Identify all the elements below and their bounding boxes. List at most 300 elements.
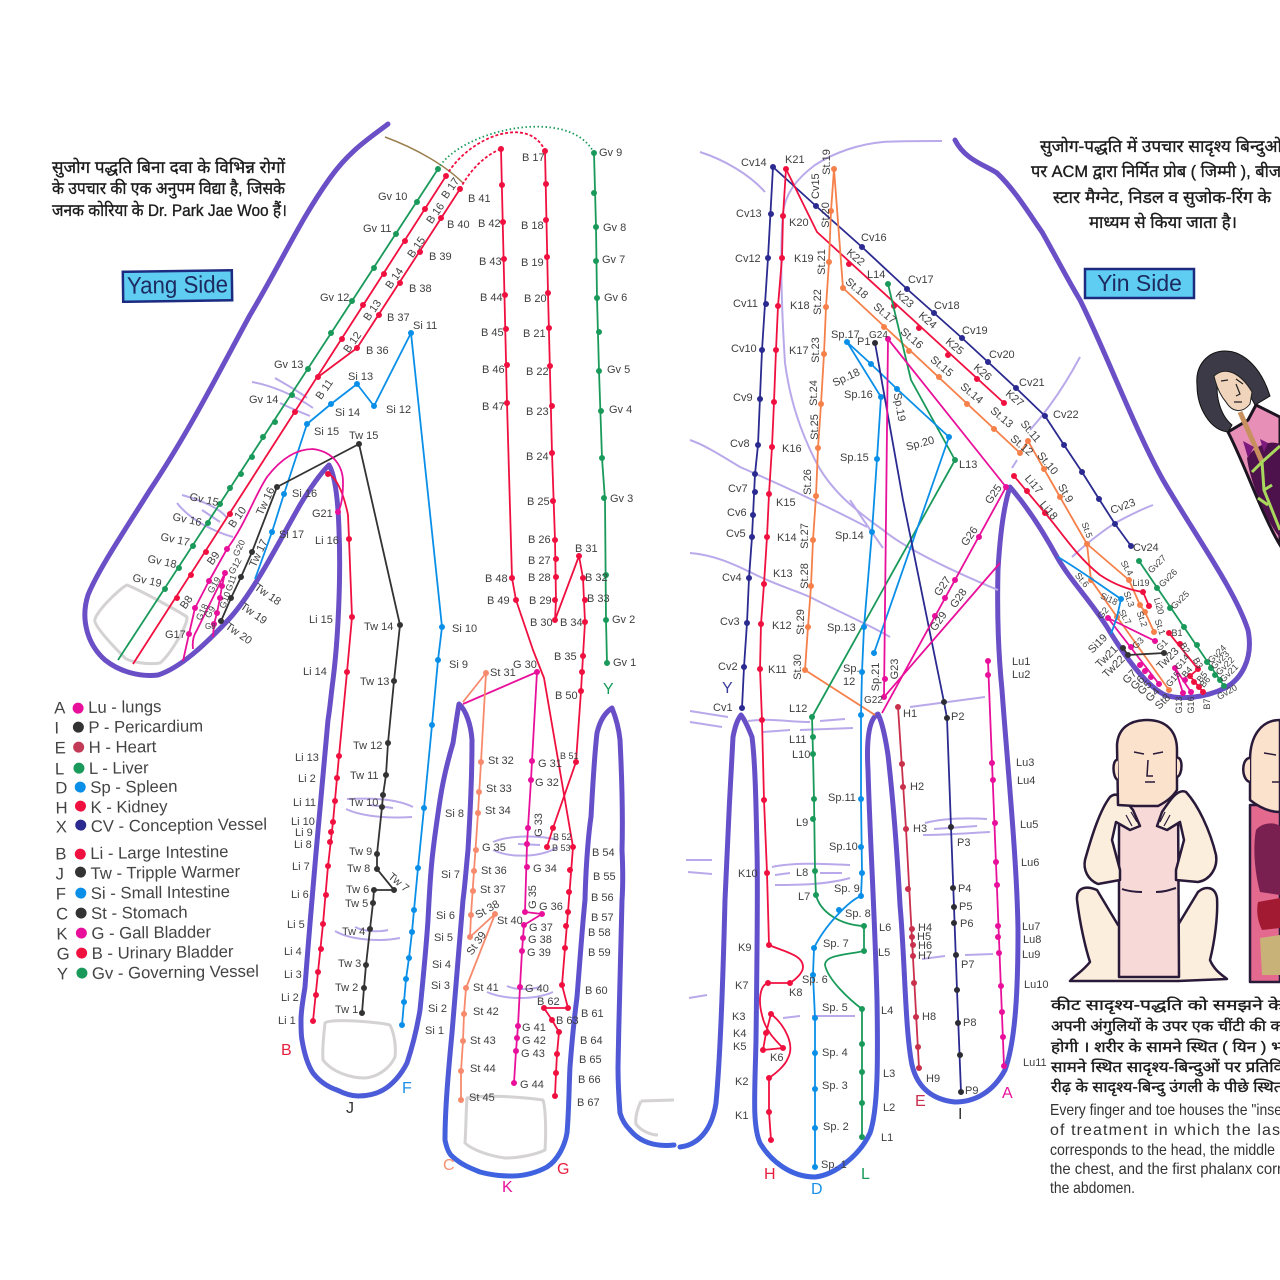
labels: small intestine: Si 10 (452, 623, 477, 635)
legend: yang meridians: Gv - Governing Vessel (92, 962, 259, 983)
labels: governing vessel Yang: Gv 5 (607, 364, 630, 376)
finger letters Yang: F (402, 1080, 412, 1097)
labels: kidney: K11 (768, 664, 787, 676)
intro text: Yang page: जनक कोरिया के Dr. Park Jae Woo हैं। (52, 200, 287, 220)
labels: fingertip Yin: St.6 (1073, 571, 1091, 589)
legend: yin meridians: Sp - Spleen (90, 777, 178, 797)
labels: urinary bladder rotated: B 14 (383, 266, 406, 291)
labels: heart, pericardium, lungs: P8 (963, 1017, 976, 1029)
labels: triple warmer: Tw 12 (353, 740, 382, 752)
labels: fingertip Yin: B3 (1191, 656, 1205, 670)
intro text: Yin page: सुजोग-पद्धति में उपचार सादृश्य बिन्दुओं (1040, 136, 1280, 157)
labels: gall bladder and stomach Yang: G 35 (482, 842, 506, 854)
labels: small intestine: Si 6 (436, 910, 455, 922)
labels: triple warmer: Tw 15 (349, 430, 378, 442)
labels: governing vessel Yang: Gv 11 (363, 223, 392, 235)
labels: spleen, liver, gall bladder Yin: Sp. 1 (821, 1159, 847, 1171)
labels: gall bladder and stomach Yang: G 44 (520, 1079, 544, 1091)
labels: kidney: K27 (1003, 388, 1026, 410)
labels: spleen, liver, gall bladder Yin: Sp. 5 (822, 1002, 848, 1014)
legend: yin meridians: D (55, 778, 67, 797)
labels: stomach Yin: Li18 (1037, 499, 1060, 522)
labels: conception vessel: Cv24 (1133, 542, 1159, 554)
labels: fingertip Yin: G14 (1173, 652, 1191, 672)
labels: conception vessel: Cv8 (730, 438, 750, 450)
meridian: gall bladder Yin (882, 339, 1006, 713)
labels: urinary bladder Yang: B 18 (521, 220, 544, 232)
labels: fingertip Yin: Li20 (1152, 596, 1166, 616)
labels: stomach Yin: St.20 (820, 202, 832, 228)
labels: conception vessel: Cv20 (989, 349, 1015, 361)
labels: spleen, liver, gall bladder Yin: P1 (857, 336, 870, 348)
labels: kidney: K5 (733, 1041, 746, 1053)
figure: sitting body (1070, 720, 1227, 981)
labels: large intestine: Li 6 (291, 889, 309, 901)
labels: urinary bladder Yang: B 58 (588, 927, 611, 939)
labels: urinary bladder rotated: B 15 (405, 235, 428, 260)
labels: urinary bladder Yang: B 23 (526, 406, 549, 418)
labels: urinary bladder Yang: B 17 (522, 152, 545, 164)
labels: triple warmer: Tw 2 (335, 982, 358, 994)
meridian: large intestine (313, 474, 352, 1021)
labels: kidney: K13 (773, 568, 793, 580)
figure: woman with lungs in finger (1197, 351, 1280, 545)
labels: triple warmer: Tw 9 (349, 846, 372, 858)
labels: triple warmer: Tw 11 (350, 770, 379, 782)
nail: finger K (465, 1096, 546, 1158)
labels: kidney: K12 (772, 620, 792, 632)
labels: spleen, liver, gall bladder Yin: L5 (878, 947, 890, 959)
labels: spleen, liver, gall bladder Yin: L6 (879, 922, 891, 934)
labels: stomach Yin: St.27 (799, 523, 811, 549)
labels: spleen, liver, gall bladder Yin: L12 (789, 703, 807, 715)
labels: urinary bladder Yang: B 27 (528, 555, 551, 567)
legend: yin meridians: A (54, 698, 66, 717)
labels: spleen, liver, gall bladder Yin: Sp. 8 (845, 908, 871, 920)
labels: urinary bladder Yang: B 47 (482, 401, 505, 413)
legend: yang meridians: G (57, 944, 70, 963)
labels: governing vessel Yang: Gv 15 (188, 491, 220, 509)
legend: yin meridians: Lu - lungs (88, 697, 162, 717)
labels: large intestine: Li 2 (298, 773, 316, 785)
labels: kidney: K24 (916, 310, 939, 332)
labels: conception vessel: Cv9 (733, 392, 753, 404)
labels: fingertip Yin: G13 (1174, 696, 1184, 714)
labels: stomach Yin: St.21 (816, 249, 828, 275)
labels: kidney: K4 (733, 1028, 746, 1040)
labels: stomach Yin: St.26 (802, 469, 814, 495)
labels: urinary bladder Yang: B 56 (591, 892, 614, 904)
labels: urinary bladder Yang: B 46 (482, 364, 505, 376)
labels: spleen, liver, gall bladder Yin: Sp. 3 (822, 1080, 848, 1092)
labels: urinary bladder Yang: B 66 (578, 1074, 601, 1086)
labels: urinary bladder Yang: B 22 (526, 366, 549, 378)
labels: urinary bladder Yang: B 43 (479, 256, 502, 268)
labels: small intestine: Si 9 (449, 659, 468, 671)
labels: gall bladder and stomach Yang: G10 (217, 590, 233, 610)
labels: gall bladder and stomach Yang: G9 (203, 604, 217, 620)
labels: fingertip Yin: St.4 (1119, 559, 1135, 577)
labels: urinary bladder Yang: B 62 (537, 996, 560, 1008)
labels: heart, pericardium, lungs: H6 (918, 940, 932, 952)
labels: urinary bladder Yang: B 51 (560, 751, 579, 761)
labels: spleen, liver, gall bladder Yin: L4 (881, 1005, 893, 1017)
labels: heart, pericardium, lungs: P7 (961, 959, 974, 971)
labels: urinary bladder rotated: B 16 (424, 201, 447, 226)
labels: heart, pericardium, lungs: H7 (918, 950, 932, 962)
legend: yang meridians: J (55, 864, 64, 883)
labels: fingertip Yin: St.2 (1135, 610, 1149, 628)
labels: urinary bladder Yang: B 38 (409, 283, 432, 295)
labels: spleen, liver, gall bladder Yin: Sp. 7 (823, 938, 849, 950)
labels: conception vessel: Cv5 (726, 528, 746, 540)
finger letters Yang: J (346, 1100, 354, 1117)
finger letters Yin: A (1002, 1085, 1013, 1102)
labels: gall bladder and stomach Yang: St 45 (469, 1092, 495, 1104)
labels: triple warmer: Tw 20 (223, 620, 254, 647)
labels: urinary bladder Yang: B 34 (560, 617, 583, 629)
labels: urinary bladder Yang: B 42 (478, 218, 501, 230)
labels: gall bladder and stomach Yang: G 33 (533, 813, 545, 837)
finger letters Yang (281, 681, 614, 1196)
legend: yang meridians: C (56, 904, 68, 923)
labels: governing vessel Yang: Gv 8 (603, 222, 626, 234)
labels: stomach Yin: St.23 (810, 337, 822, 363)
labels: gall bladder and stomach Yang: St 43 (470, 1035, 496, 1047)
legend: yin meridians: H (55, 798, 68, 817)
labels: urinary bladder Yang: B 37 (387, 312, 410, 324)
labels: kidney: K1 (735, 1110, 748, 1122)
nail: finger partial (636, 1100, 674, 1135)
legend: yin meridians (54, 696, 267, 836)
labels: spleen, liver, gall bladder Yin: L7 (798, 891, 810, 903)
body text: Hindi: सामने स्थित सादृश्य-बिन्दुओं पर प्रतिवि (1051, 1058, 1280, 1077)
labels: urinary bladder Yang: B 55 (593, 871, 616, 883)
labels: small intestine: Si 7 (441, 869, 460, 881)
labels: urinary bladder rotated: B 10 (226, 505, 249, 530)
labels: kidney: K7 (735, 980, 748, 992)
labels: triple warmer (223, 430, 411, 1016)
labels: kidney: K18 (790, 300, 810, 312)
labels: small intestine: Si 16 (292, 488, 317, 500)
labels: stomach Yin: St.17 (871, 301, 898, 327)
labels: conception vessel: Cv13 (736, 208, 762, 220)
labels: conception vessel: Cv2 (718, 661, 738, 673)
legend: yin meridians: L - Liver (89, 758, 149, 778)
legend: yin meridians: L (55, 759, 64, 778)
labels: heart, pericardium, lungs: P2 (951, 711, 964, 723)
labels: fingertip Yin: G16 (1186, 696, 1196, 714)
labels: fingertip Yin: G2 (1095, 605, 1111, 621)
labels: fingertip Yin: B2 (1178, 641, 1192, 655)
labels: urinary bladder Yang: B 61 (581, 1008, 604, 1020)
labels: conception vessel: Cv7 (728, 483, 748, 495)
meridian: heart (898, 707, 919, 1068)
labels: spleen, liver, gall bladder Yin: L2 (883, 1102, 895, 1114)
meridian: large intestine Yin (1014, 476, 1149, 606)
legend: yang meridians: B - Urinary Bladder (92, 942, 234, 963)
labels: urinary bladder Yang: B 29 (529, 595, 552, 607)
labels: stomach Yin: St.19 (821, 149, 833, 175)
labels: gall bladder and stomach Yang: G19 (205, 575, 223, 595)
labels: urinary bladder Yang: B 24 (526, 451, 549, 463)
heading: Yin Side (1085, 269, 1194, 298)
labels: conception vessel: Cv16 (861, 232, 887, 244)
labels: urinary bladder Yang: B 52 (553, 832, 572, 842)
labels: spleen, liver, gall bladder Yin: Sp.11 (828, 792, 856, 804)
labels: fingertip Yin: B1 (1171, 628, 1183, 638)
figure: body with organs (1243, 720, 1280, 982)
labels: urinary bladder Yang: B 20 (524, 293, 547, 305)
labels: gall bladder and stomach Yang: St 32 (488, 755, 514, 767)
labels: small intestine: Si 8 (445, 808, 464, 820)
finger letters Yang: B (281, 1042, 292, 1059)
legend: yin meridians: K - Kidney (90, 797, 168, 817)
labels: urinary bladder Yang: B 36 (366, 345, 389, 357)
labels: fingertip Yin: St.3 (1122, 590, 1136, 608)
labels: gall bladder and stomach Yang: G 39 (527, 947, 551, 959)
labels: gall bladder and stomach Yang: G 34 (533, 863, 557, 875)
labels: kidney: K8 (789, 987, 802, 999)
labels: conception vessel: Cv15 (810, 173, 822, 199)
labels: small intestine: Si 4 (432, 959, 451, 971)
labels: stomach Yin: St.25 (809, 414, 821, 440)
labels: governing vessel Yang: Gv 18 (146, 553, 178, 571)
labels: heart, pericardium, lungs: H4 (918, 922, 932, 934)
labels: conception vessel: Cv19 (962, 325, 988, 337)
legend: yang meridians: G - Gall Bladder (91, 922, 212, 943)
labels: kidney: K15 (776, 497, 796, 509)
labels: spleen, liver, gall bladder Yin: Sp. 2 (823, 1121, 849, 1133)
labels: large intestine: Li 3 (284, 969, 302, 981)
legend: yang meridians: Si - Small Intestine (91, 882, 230, 903)
labels: urinary bladder Yang: B 41 (468, 193, 491, 205)
labels: gall bladder and stomach Yang: St 33 (486, 783, 512, 795)
labels: triple warmer: Tw 7 (386, 871, 411, 895)
legend: yang meridians: Y (57, 964, 68, 983)
labels: kidney: K14 (777, 532, 797, 544)
legend: yang meridians: F (56, 884, 66, 903)
labels: large intestine: Li 9 (295, 827, 313, 839)
labels: gall bladder and stomach Yang: G 42 (522, 1035, 546, 1047)
labels: fingertip Yin: St.1 (1153, 618, 1167, 636)
legend: yin meridians: I (54, 718, 59, 737)
labels: large intestine: Li 1 (278, 1015, 296, 1027)
labels: conception vessel: Cv6 (727, 507, 747, 519)
labels: stomach Yin: St.14 (958, 381, 985, 407)
labels: heart, pericardium, lungs: P4 (958, 883, 971, 895)
labels: triple warmer: Tw 6 (346, 884, 369, 896)
labels: large intestine: Li 16 (315, 535, 339, 547)
labels: conception vessel: Cv21 (1019, 377, 1045, 389)
labels: spleen, liver, gall bladder Yin: Sp.15 (840, 452, 869, 464)
labels: governing vessel Yang: Gv 9 (599, 147, 622, 159)
labels: heart, pericardium, lungs: H2 (910, 781, 924, 793)
legend: yin meridians: H - Heart (89, 737, 157, 757)
labels: large intestine: Li 10 (291, 816, 315, 828)
intro text: Yin page: स्टार मैग्नेट, निडल व सुजोक-रिंग के (1053, 187, 1272, 208)
labels: gall bladder and stomach Yang: St 39 (465, 930, 489, 958)
labels: fingertip Yin: G6 (1129, 674, 1147, 692)
labels: fingertip Yin: Tw21 (1093, 643, 1121, 671)
labels: stomach Yin (792, 149, 1075, 680)
labels: governing vessel Yang: Gv 2 (612, 614, 635, 626)
labels: fingertip Yin: B7 (1202, 698, 1212, 710)
labels: heart, pericardium, lungs: P3 (957, 837, 970, 849)
labels: large intestine: Li 8 (294, 839, 312, 851)
labels: kidney (732, 154, 1026, 1122)
labels: heart, pericardium, lungs: Lu8 (1023, 934, 1041, 946)
labels: gall bladder and stomach Yang: G 36 (539, 901, 563, 913)
labels: urinary bladder rotated: B 17 (439, 176, 462, 201)
labels: spleen, liver, gall bladder Yin: L13 (959, 459, 977, 471)
labels: heart, pericardium, lungs: Lu9 (1022, 949, 1040, 961)
labels: stomach Yin: St.22 (812, 289, 824, 315)
labels: urinary bladder rotated: B9 (205, 550, 223, 568)
labels: spleen, liver, gall bladder Yin: G29 (928, 610, 950, 634)
labels: stomach Yin: St.24 (808, 380, 820, 406)
labels: large intestine: Li 13 (295, 752, 319, 764)
intro text: Yang page (52, 157, 287, 220)
labels: triple warmer: Tw 5 (345, 898, 368, 910)
body text: Hindi: अपनी अंगुलियों के उपर एक चींटी की क (1051, 1017, 1280, 1036)
labels: triple warmer: Tw 1 (335, 1004, 358, 1016)
labels: heart, pericardium, lungs: Lu7 (1022, 921, 1040, 933)
meridian: pericardium (875, 343, 961, 1092)
meridian: lungs (988, 661, 1004, 1066)
labels: governing vessel Yang: Gv 7 (602, 254, 625, 266)
labels: spleen, liver, gall bladder Yin: L11 (789, 734, 807, 746)
labels: governing vessel Yang: Gv 17 (159, 531, 191, 549)
labels: gall bladder and stomach Yang: G11 (224, 574, 238, 592)
labels: fingertip Yin: Si18 (1099, 591, 1119, 607)
labels: fingertip Yin: B5 (1195, 670, 1209, 684)
labels: fingertip Yin: G5 (1136, 679, 1154, 697)
meridian: stomach Yang (461, 673, 495, 1100)
labels: small intestine: Si 3 (431, 980, 450, 992)
labels: urinary bladder Yang: B 53 (552, 843, 571, 853)
labels: kidney: K26 (971, 362, 994, 384)
labels: gall bladder and stomach Yang: G12 (226, 556, 244, 576)
labels: small intestine: Si 2 (428, 1003, 447, 1015)
labels: urinary bladder rotated: B 12 (341, 330, 364, 355)
labels: conception vessel: Cv14 (741, 157, 767, 169)
labels: fingertip Yin: Gv20 (1215, 682, 1239, 702)
labels: governing vessel Yang: Gv 12 (320, 292, 349, 304)
body text: English: of treatment in which the las (1050, 1122, 1280, 1139)
labels: stomach Yin: St.30 (792, 654, 804, 680)
labels: urinary bladder Yang: B 39 (429, 251, 452, 263)
labels: conception vessel: Cv4 (722, 572, 742, 584)
labels: heart, pericardium, lungs: Lu10 (1024, 979, 1048, 991)
labels: governing vessel Yang: Gv 13 (274, 359, 303, 371)
labels: conception vessel: Cv17 (908, 274, 934, 286)
labels: stomach Yin: St.15 (928, 354, 955, 380)
finger letters Yin (722, 680, 1013, 1198)
labels: spleen, liver, gall bladder Yin: L9 (796, 817, 808, 829)
labels: spleen, liver, gall bladder Yin: Sp.14 (835, 530, 864, 542)
labels: stomach Yin: St.9 (1055, 482, 1075, 505)
labels: spleen, liver, gall bladder Yin: G28 (948, 587, 970, 611)
labels: large intestine: Li 4 (284, 946, 302, 958)
intro text: Yin page: माध्यम से किया जाता है। (1089, 212, 1237, 232)
labels: fingertip Yin: Gv22 (1214, 655, 1236, 677)
labels: urinary bladder Yang: B 32 (585, 572, 608, 584)
legend: yang meridians: K (56, 924, 68, 943)
body text: Hindi (1051, 996, 1280, 1097)
labels: large intestine: Li 5 (287, 919, 305, 931)
labels: urinary bladder Yang: B 60 (585, 985, 608, 997)
nail: finger F (323, 1021, 395, 1078)
finger letters Yin: L (861, 1166, 870, 1183)
labels: spleen, liver, gall bladder Yin: Sp. 6 (802, 974, 828, 986)
labels: urinary bladder Yang: B 26 (528, 534, 551, 546)
labels: conception vessel: Cv10 (731, 343, 757, 355)
meridian: governing vessel Yang (118, 127, 607, 663)
labels: large intestine: Li 2 (281, 992, 299, 1004)
meridian: spleen (813, 342, 949, 1167)
labels: fingertip Yin: Gv26 (1157, 567, 1179, 589)
labels: gall bladder and stomach Yang: St 38 (473, 898, 502, 921)
intro text: Yin page (1031, 136, 1280, 232)
labels: triple warmer: Tw 3 (338, 958, 361, 970)
labels: urinary bladder Yang: B 45 (481, 327, 504, 339)
labels: heart, pericardium, lungs: H1 (903, 708, 917, 720)
labels: stomach Yin: St.16 (898, 326, 925, 352)
labels: spleen, liver, gall bladder Yin: L1 (881, 1132, 893, 1144)
labels: gall bladder and stomach Yang: St 40 (497, 915, 523, 927)
labels: fingertip Yin: Gv21 (1218, 662, 1240, 684)
labels: fingertip Yin: Gv24 (1206, 643, 1228, 665)
labels: conception vessel: Cv18 (934, 300, 960, 312)
labels: stomach Yin: St.10 (1034, 450, 1060, 477)
labels: gall bladder and stomach Yang: G21 (312, 508, 333, 520)
labels: stomach Yin: St.13 (988, 405, 1015, 431)
labels: urinary bladder Yang: B 33 (587, 593, 610, 605)
labels: gall bladder and stomach Yang: St 34 (485, 805, 511, 817)
labels: spleen, liver, gall bladder Yin: Sp. 9 (834, 883, 860, 895)
legend: yin meridians: CV - Conception Vessel (91, 815, 267, 836)
labels: urinary bladder Yang: B 50 (555, 690, 578, 702)
labels: spleen, liver, gall bladder Yin: G26 (959, 525, 981, 549)
labels: urinary bladder Yang: B 21 (523, 328, 546, 340)
labels: urinary bladder Yang: B 25 (527, 496, 550, 508)
labels: heart, pericardium, lungs (903, 656, 1048, 1097)
labels: spleen, liver, gall bladder Yin: G25 (983, 483, 1005, 507)
finger letters Yin: D (811, 1181, 823, 1198)
body text: English: the abdomen. (1050, 1180, 1135, 1197)
labels: heart, pericardium, lungs: Lu2 (1012, 669, 1030, 681)
labels: spleen, liver, gall bladder Yin: Sp.17 (831, 329, 860, 341)
labels: kidney: K17 (789, 345, 809, 357)
labels: spleen, liver, gall bladder Yin: Sp.21 (870, 663, 882, 691)
labels: urinary bladder Yang: B 19 (521, 257, 544, 269)
body text: Hindi: रीढ़ के सादृश्य-बिन्दु उंगली के पीछे स्थित (1051, 1078, 1280, 1097)
labels: gall bladder and stomach Yang: G 37 (529, 922, 553, 934)
labels: gall bladder and stomach Yang: G 35 (527, 885, 539, 909)
labels: spleen, liver, gall bladder Yin: 12 (843, 676, 855, 688)
labels: conception vessel: Cv23 (1109, 497, 1137, 517)
labels: heart, pericardium, lungs: Lu6 (1021, 857, 1039, 869)
labels: fingertip Yin: B6 (1198, 675, 1212, 689)
labels: spleen, liver, gall bladder Yin: Sp.13 (827, 622, 856, 634)
labels: small intestine: Si 17 (279, 529, 304, 541)
labels: urinary bladder Yang: B 40 (447, 219, 470, 231)
labels: small intestine: Si 14 (335, 407, 360, 419)
labels: triple warmer: Tw 14 (364, 621, 393, 633)
labels: gall bladder and stomach Yang: G 41 (522, 1022, 546, 1034)
labels: kidney: K21 (785, 154, 805, 166)
